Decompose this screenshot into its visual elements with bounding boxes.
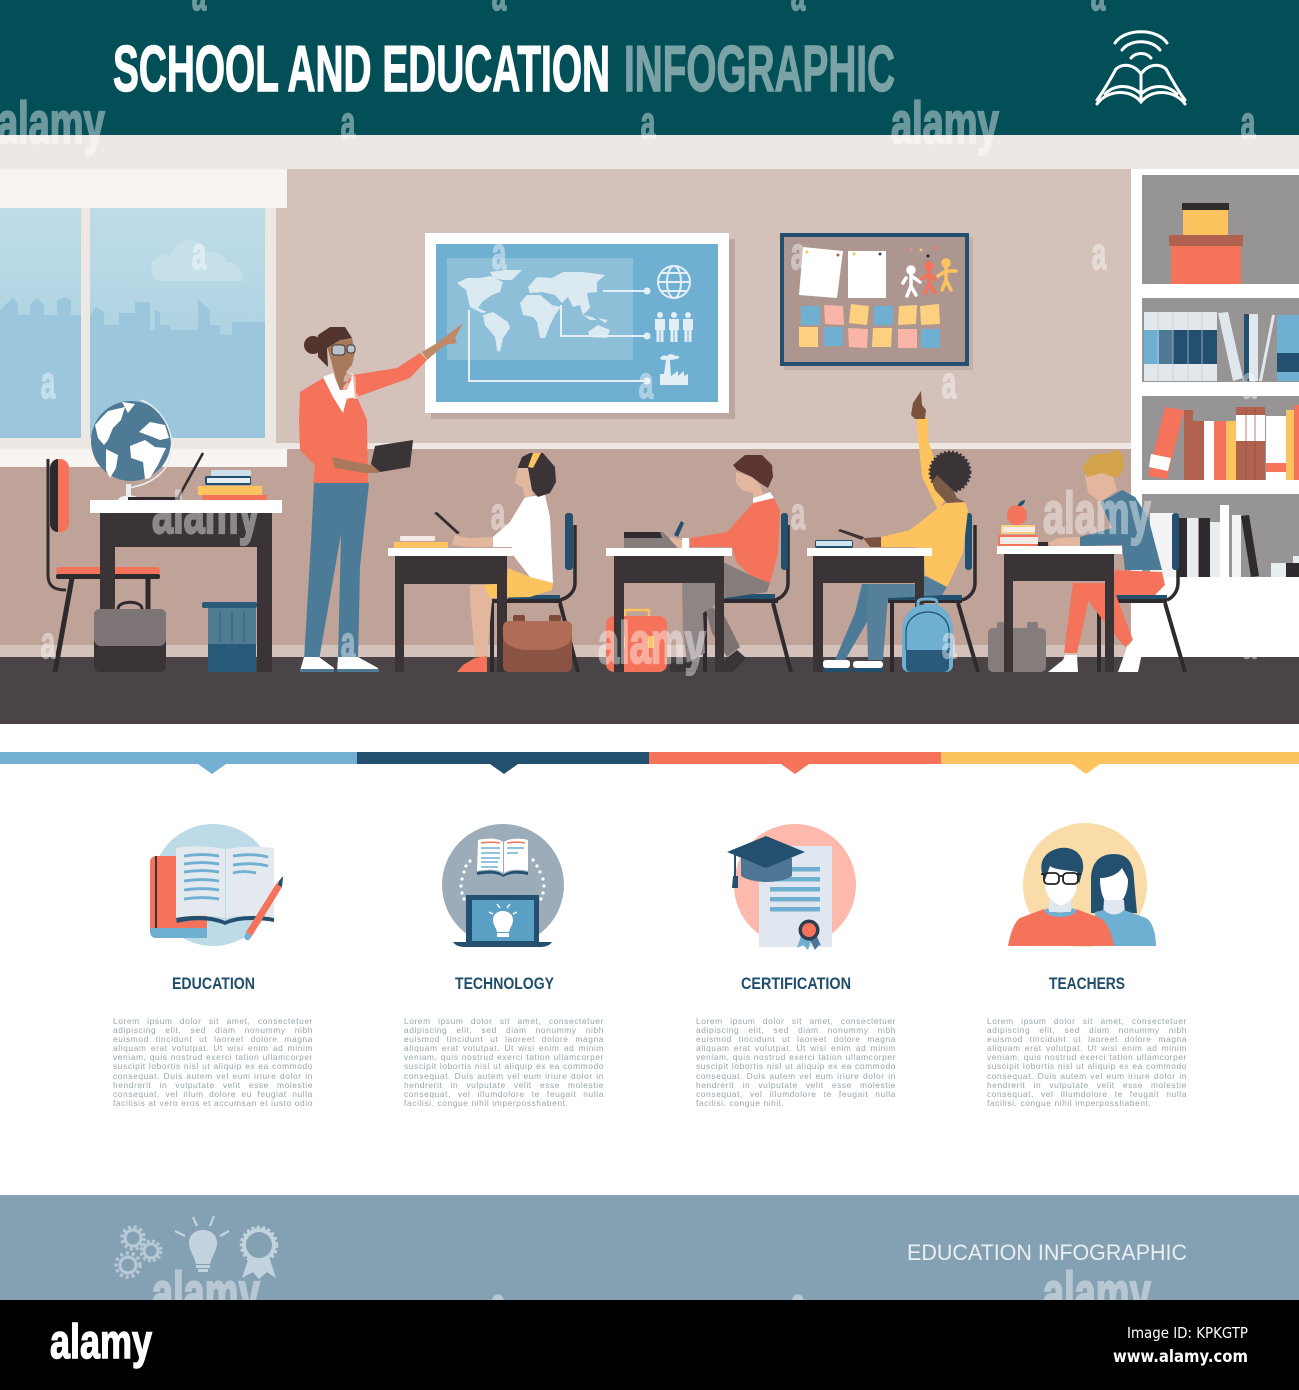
student two bbox=[670, 455, 791, 672]
text block: certification: Lorem ipsum dolor sit amet, consectetuer bbox=[696, 1016, 896, 1026]
books row 2 bbox=[1148, 405, 1299, 480]
stack of books bbox=[198, 470, 267, 500]
icon: light bulb bbox=[175, 1216, 229, 1272]
text block: certification: veniam, quis nostrud exerci tation ullamcorper bbox=[696, 1052, 896, 1062]
watermarks: alamy bbox=[1043, 482, 1151, 546]
watermarks: a bbox=[41, 358, 56, 408]
watermarks: a bbox=[341, 618, 356, 668]
chair bbox=[888, 513, 978, 672]
text block: teachers: consequat. Duis autem vel eum iriure dolor in bbox=[987, 1071, 1187, 1081]
text block: certification: euismod tincidunt ut laoreet dolore magna bbox=[696, 1034, 896, 1044]
head bbox=[327, 338, 355, 373]
student four desk bbox=[997, 500, 1122, 672]
text block: certification bbox=[696, 1016, 896, 1108]
text block: certification: adipiscing elit, sed diam nonummy nibh bbox=[696, 1025, 896, 1035]
watermarks: a bbox=[1092, 229, 1107, 279]
world map bbox=[457, 270, 610, 352]
text block: education: hendrerit in vulputate velit esse molestie bbox=[113, 1080, 313, 1090]
text block: teachers: suscipit lobortis nisl ut aliquip ex ea commodo bbox=[987, 1061, 1187, 1071]
footer title: EDUCATION INFOGRAPHIC bbox=[907, 1240, 1187, 1265]
text block: teachers: facilisi. congue nihil imperposshabent. bbox=[987, 1098, 1151, 1108]
text block: teachers: euismod tincidunt ut laoreet dolore magna bbox=[987, 1034, 1187, 1044]
website: www.alamy.com bbox=[1113, 1347, 1248, 1367]
watermarks: a bbox=[1242, 358, 1257, 408]
legs bbox=[1064, 583, 1090, 653]
watermarks: a bbox=[641, 98, 656, 148]
watermarks: a bbox=[639, 358, 654, 408]
storage boxes bbox=[1169, 203, 1243, 284]
text block: certification: aliquam erat volutpat. Ut wisi enim ad minim bbox=[696, 1043, 896, 1053]
icon: diploma and cap bbox=[727, 824, 856, 950]
image id: Image ID: KPKGTP bbox=[1127, 1324, 1248, 1342]
legs bbox=[835, 584, 880, 660]
icon: globe bbox=[658, 266, 690, 298]
icon: medal bbox=[241, 1227, 277, 1279]
student three desk bbox=[807, 540, 932, 672]
sticky notes bbox=[799, 304, 940, 348]
text block: education bbox=[113, 1016, 313, 1108]
books bbox=[394, 536, 448, 548]
brown satchel bbox=[503, 615, 572, 672]
laptop bbox=[128, 453, 203, 500]
watermarks: a bbox=[942, 618, 957, 668]
header band bbox=[0, 0, 1299, 135]
watermarks: a bbox=[492, 229, 507, 279]
text block: technology: adipiscing elit, sed diam nonummy nibh bbox=[404, 1025, 604, 1035]
text block: technology bbox=[404, 1016, 604, 1108]
legs bbox=[682, 563, 770, 600]
laptop on desk bbox=[624, 532, 678, 548]
text block: certification: suscipit lobortis nisl ut aliquip ex ea commodo bbox=[696, 1061, 896, 1071]
text block: teachers: aliquam erat volutpat. Ut wisi enim ad minim bbox=[987, 1043, 1187, 1053]
torso bbox=[690, 498, 780, 583]
briefcase bbox=[94, 602, 166, 672]
chair bbox=[48, 459, 160, 672]
heading: TECHNOLOGY bbox=[455, 975, 554, 993]
bulletin board bbox=[780, 233, 973, 370]
window bbox=[0, 169, 287, 467]
text block: education: facilisis at vero eros et accumsan et iusto odio bbox=[113, 1098, 313, 1108]
blue backpack bbox=[902, 599, 953, 672]
student one bbox=[434, 453, 578, 672]
books row 1 bbox=[1144, 312, 1299, 381]
text block: technology: Lorem ipsum dolor sit amet, consectetuer bbox=[404, 1016, 604, 1026]
waste bin bbox=[202, 600, 272, 672]
black credit strip bbox=[0, 1300, 1299, 1390]
watermarks: a bbox=[343, 358, 358, 408]
watermarks: a bbox=[942, 358, 957, 408]
book bbox=[815, 540, 853, 548]
desk bbox=[90, 500, 282, 672]
heading: EDUCATION bbox=[172, 975, 255, 993]
shoes bbox=[1048, 640, 1142, 672]
watermarks: a bbox=[41, 618, 56, 668]
text block: education: adipiscing elit, sed diam nonummy nibh bbox=[113, 1025, 313, 1035]
watermarks: a bbox=[791, 229, 806, 279]
text block: technology: suscipit lobortis nisl ut aliquip ex ea commodo bbox=[404, 1061, 604, 1071]
text block: teachers: Lorem ipsum dolor sit amet, consectetuer bbox=[987, 1016, 1187, 1026]
student one desk bbox=[388, 536, 513, 672]
watermarks: alamy bbox=[598, 612, 706, 676]
footer watermarks: alamy bbox=[1043, 1262, 1151, 1326]
text block: technology: euismod tincidunt ut laoreet dolore magna bbox=[404, 1034, 604, 1044]
chair bbox=[1099, 513, 1185, 672]
coral lunchbox bbox=[606, 610, 667, 672]
text block: teachers: veniam, quis nostrud exerci tation ullamcorper bbox=[987, 1052, 1187, 1062]
icon: gears bbox=[116, 1227, 161, 1277]
heading: CERTIFICATION bbox=[741, 975, 851, 993]
text block: teachers: adipiscing elit, sed diam nonummy nibh bbox=[987, 1025, 1187, 1035]
column: education bbox=[150, 824, 283, 993]
watermarks bbox=[0, 0, 1257, 676]
chair bbox=[705, 513, 791, 672]
teacher figure bbox=[299, 323, 463, 672]
watermarks: a bbox=[341, 98, 356, 148]
text block: education: suscipit lobortis nisl ut aliquip ex ea commodo bbox=[113, 1061, 313, 1071]
text block: technology: consequat. Duis autem vel eum iriure dolor in bbox=[404, 1071, 604, 1081]
watermarks: a bbox=[791, 489, 806, 539]
watermarks: alamy bbox=[0, 92, 105, 156]
column: teachers bbox=[1008, 823, 1156, 993]
icon: book and pencil bbox=[150, 824, 283, 946]
paper people bbox=[903, 260, 956, 296]
footer band bbox=[0, 1195, 1299, 1300]
watermarks: a bbox=[192, 229, 207, 279]
title: SCHOOL AND EDUCATION bbox=[113, 32, 610, 105]
heading: TEACHERS bbox=[1049, 975, 1125, 993]
footer icons bbox=[116, 1216, 277, 1279]
shoes bbox=[300, 657, 379, 672]
column: technology bbox=[442, 824, 564, 993]
text block: certification: hendrerit in vulputate velit esse molestie bbox=[696, 1080, 896, 1090]
man bbox=[1008, 848, 1114, 946]
globe bbox=[91, 400, 172, 500]
student three bbox=[823, 391, 978, 672]
text block: teachers bbox=[987, 1016, 1187, 1108]
text block: education: Lorem ipsum dolor sit amet, consectetuer bbox=[113, 1016, 313, 1026]
forearm and tablet bbox=[332, 457, 388, 473]
watermarks: a bbox=[491, 489, 506, 539]
text block: teachers: consequat, vel illumdolore te feugait nulla bbox=[987, 1089, 1187, 1099]
text block: education: consequat. Duis autem vel eum iriure dolor in bbox=[113, 1071, 313, 1081]
woman bbox=[1091, 854, 1156, 946]
text block: education: consequat, vel illum dolore eu feugiat nulla bbox=[113, 1089, 313, 1099]
text block: certification: facilisi. congue nihil. bbox=[696, 1098, 784, 1108]
text block: certification: consequat, vel illumdolore te feugait nulla bbox=[696, 1089, 896, 1099]
text block: technology: veniam, quis nostrud exerci tation ullamcorper bbox=[404, 1052, 604, 1062]
text block: technology: hendrerit in vulputate velit esse molestie bbox=[404, 1080, 604, 1090]
student two desk bbox=[606, 532, 732, 672]
watermarks: a bbox=[1241, 98, 1256, 148]
text block: technology: consequat, vel illumdolore te feugait nulla bbox=[404, 1089, 604, 1099]
raised arm bbox=[916, 418, 947, 510]
watermarks: alamy bbox=[152, 482, 260, 546]
title: INFOGRAPHIC bbox=[624, 32, 895, 105]
bookshelf bbox=[1131, 169, 1299, 657]
icon: wireless book bbox=[1097, 32, 1185, 104]
books row 3 bbox=[1150, 505, 1299, 577]
text block: teachers: hendrerit in vulputate velit esse molestie bbox=[987, 1080, 1187, 1090]
wall background bbox=[0, 135, 1299, 724]
text block: technology: aliquam erat volutpat. Ut wisi enim ad minim bbox=[404, 1043, 604, 1053]
icon: two people bbox=[1008, 823, 1156, 947]
icon: people bbox=[655, 312, 693, 342]
icon: factory bbox=[660, 354, 688, 385]
grey bag bbox=[988, 622, 1046, 672]
pointing hand bbox=[422, 323, 463, 360]
watermarks: alamy bbox=[891, 92, 999, 156]
column: certification bbox=[727, 824, 856, 993]
classroom scene bbox=[0, 135, 1299, 724]
footer watermarks bbox=[152, 1262, 1151, 1330]
footer watermarks: a bbox=[791, 1280, 806, 1330]
student four bbox=[1048, 449, 1185, 672]
world map board bbox=[425, 233, 735, 419]
footer watermarks: alamy bbox=[152, 1262, 260, 1326]
watermarks: a bbox=[1242, 618, 1257, 668]
text block: education: veniam, quis nostrud exerci tation ullamcorper bbox=[113, 1052, 313, 1062]
footer watermarks: a bbox=[491, 1280, 506, 1330]
teacher desk set bbox=[48, 400, 282, 672]
text block: education: aliquam erat volutpat. Ut wisi enim ad minim bbox=[113, 1043, 313, 1053]
text block: certification: consequat. Duis autem vel eum iriure dolor in bbox=[696, 1071, 896, 1081]
alamy logo: alamy bbox=[50, 1316, 152, 1369]
text block: education: euismod tincidunt ut laoreet dolore magna bbox=[113, 1034, 313, 1044]
section colour bar bbox=[0, 752, 1299, 774]
icon: laptop and book bbox=[442, 824, 564, 947]
neck and collar bbox=[332, 365, 352, 392]
chair bbox=[492, 513, 578, 672]
text block: technology: facilisi. congue nihil imperposshabent. bbox=[404, 1098, 568, 1108]
books, tablet and apple bbox=[998, 500, 1048, 546]
